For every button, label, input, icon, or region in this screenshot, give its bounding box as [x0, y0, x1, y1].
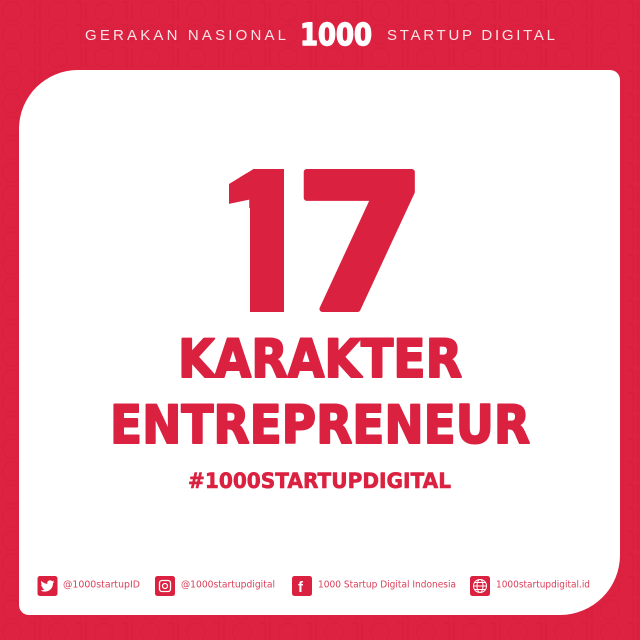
icon: instagram: [155, 576, 175, 596]
icon: facebook: [292, 576, 312, 596]
header: [85, 18, 555, 53]
hashtag: #1000STARTUPDIGITAL: [188, 469, 451, 493]
digit 7: 7: [294, 135, 427, 354]
footer social links: [38, 576, 590, 596]
header text right: STARTUP DIGITAL: [387, 27, 555, 44]
twitter handle: @1000startupID: [63, 580, 140, 590]
icon: globe: [470, 576, 490, 596]
website: 1000startupdigital.id: [496, 580, 590, 590]
logo 1000: 1000: [300, 18, 372, 53]
facebook name: 1000 Startup Digital Indonesia: [318, 580, 456, 590]
white panel: [19, 70, 620, 615]
icon: facebook: f: [298, 579, 304, 596]
icon: twitter: [38, 576, 58, 596]
title line 2: ENTREPRENEUR: [110, 395, 530, 456]
title line 1: KARAKTER: [178, 329, 462, 390]
header text left: GERAKAN NASIONAL: [85, 27, 286, 44]
big number 17: [229, 169, 415, 312]
digit 1: 1: [199, 135, 330, 354]
instagram handle: @1000startupdigital: [181, 580, 275, 590]
